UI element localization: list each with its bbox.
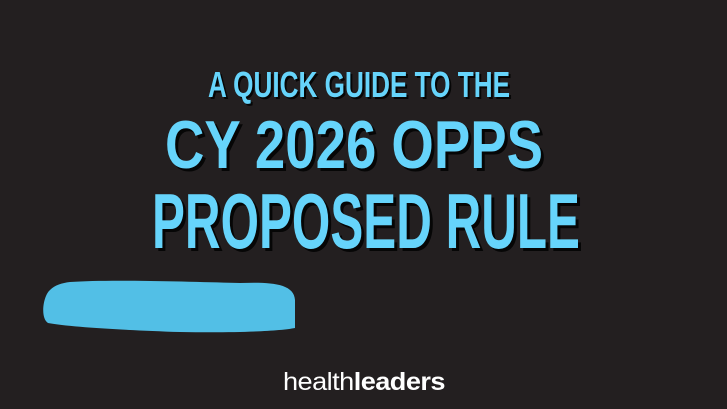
subtitle line: A QUICK GUIDE TO THE: A QUICK GUIDE TO THE	[210, 66, 512, 107]
title line: CY 2026 OPPS: CY 2026 OPPS	[165, 107, 543, 183]
logo: healthleaders: healthleaders	[283, 368, 445, 396]
title	[152, 64, 583, 268]
blue brush stroke	[43, 281, 295, 332]
subtitle line: A QUICK GUIDE TO THE: A QUICK GUIDE TO THE	[208, 64, 510, 105]
title line: CY 2026 OPPS: CY 2026 OPPS	[168, 110, 546, 186]
